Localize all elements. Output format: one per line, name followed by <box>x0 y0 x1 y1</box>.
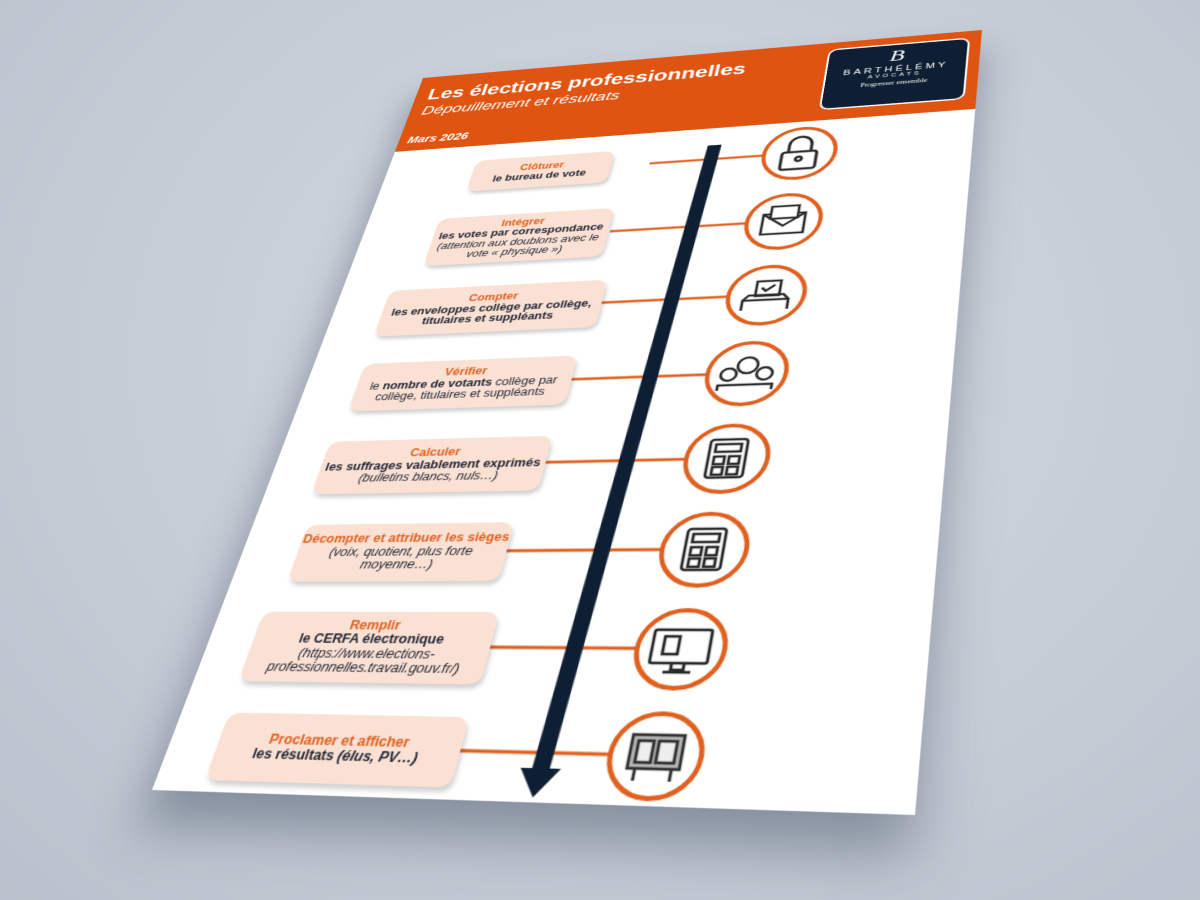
box 5: Calculer <box>408 446 462 459</box>
date: Mars 2026 <box>406 130 470 145</box>
logo: B <box>889 47 906 65</box>
box 4 <box>348 356 578 411</box>
icon: envelope <box>760 205 807 235</box>
arrow <box>514 145 722 799</box>
logo: BARTHÉLÉMY <box>843 61 949 77</box>
icon: calculator <box>704 439 749 478</box>
header <box>395 30 982 152</box>
box 4: Vérifier <box>443 365 489 378</box>
box 7: (https://www.elections-professionnelles.travail.gouv.fr/) <box>265 645 461 676</box>
box 2: les votes par correspondance (attention aux doublons avec le vote « physique ») <box>436 221 605 259</box>
box 2: Intégrer <box>500 215 546 228</box>
timeline graphics <box>460 126 838 802</box>
logo <box>819 37 970 110</box>
box 6: Décompter et attribuer les sièges (voix, quotient, plus forte moyenne…) <box>301 530 511 572</box>
box 8: Proclamer et afficher <box>267 731 412 750</box>
title: Les élections professionnelles <box>425 60 748 104</box>
icon: ballot box <box>741 280 791 311</box>
box 1 <box>466 151 615 192</box>
box 5 <box>311 436 553 494</box>
box 7: le CERFA électronique <box>297 631 446 647</box>
box 8: les résultats (élus, PV…) <box>250 746 420 766</box>
box 3 <box>374 280 608 337</box>
page <box>152 30 982 815</box>
box 7: Remplir <box>348 617 403 632</box>
logo: AVOCATS <box>867 71 922 80</box>
box 3: Compter <box>467 290 520 304</box>
box 7 <box>238 612 499 684</box>
box 1: le bureau de vote <box>491 167 587 183</box>
box 4: le nombre de votants collège par collège, titulaires et suppléants <box>368 374 559 403</box>
box 1: Clôturer <box>519 160 565 173</box>
icon: monitor <box>647 630 713 673</box>
box 5: les suffrages valablement exprimés (bulletins blancs, nuls…) <box>324 456 542 485</box>
box 2 <box>423 208 614 266</box>
icon: lock <box>779 136 819 170</box>
logo: Progresser ensemble <box>860 77 928 88</box>
icon: board <box>625 734 685 782</box>
box 8 <box>205 713 469 788</box>
icon: people <box>717 356 776 391</box>
subtitle: Dépouillement et résultats <box>420 89 621 118</box>
circles <box>601 126 839 801</box>
box 3: les enveloppes collège par collège, titulaires et suppléants <box>390 297 593 327</box>
box 6 <box>287 522 514 582</box>
icon: calculator 2 <box>681 529 727 570</box>
